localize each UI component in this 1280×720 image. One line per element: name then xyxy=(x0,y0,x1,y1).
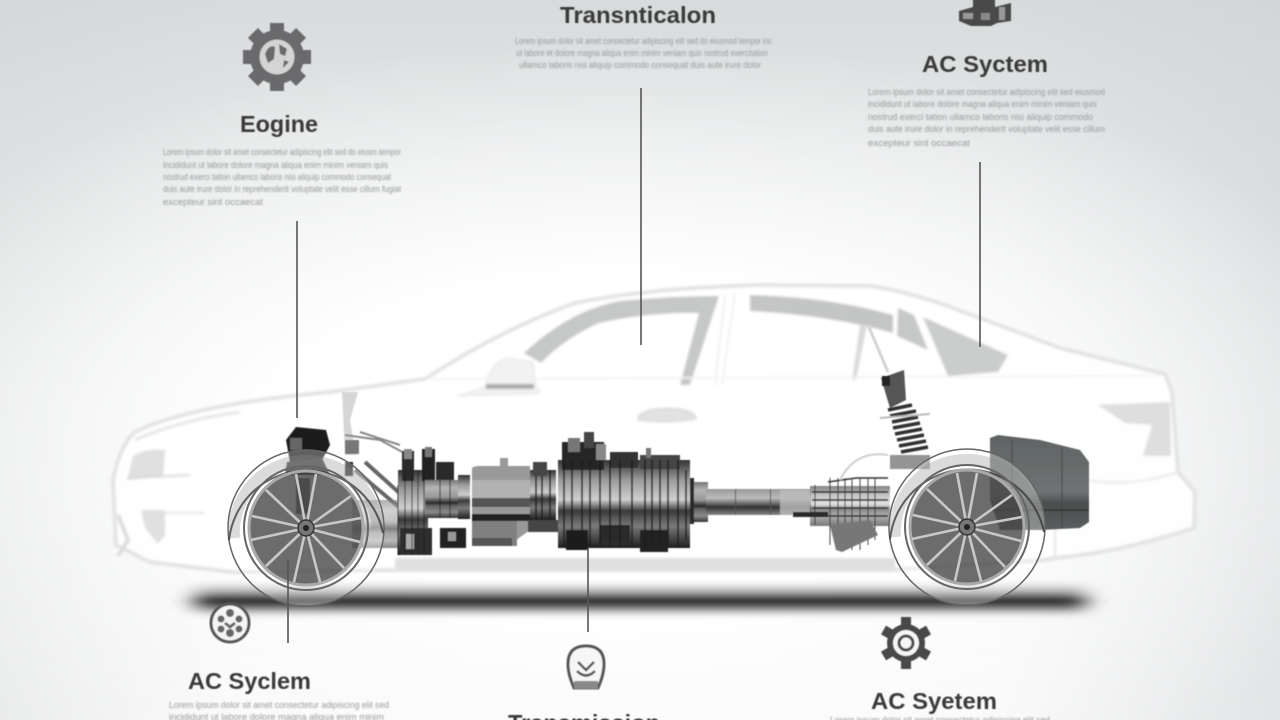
rear pillar xyxy=(852,325,867,380)
front differential xyxy=(352,447,470,555)
icon: transmission bottom xyxy=(568,646,604,689)
text: AC description top xyxy=(868,87,1105,148)
text: AC description top: nostrud exerci tation ullamco laboris nisi aliquip commodo xyxy=(868,112,1093,122)
coupling xyxy=(528,462,568,532)
mirror xyxy=(458,358,540,396)
heading: AC system top: AC Syctem xyxy=(922,51,1048,77)
text: AC description bottom-left xyxy=(169,700,389,720)
quarter glass small xyxy=(897,308,928,350)
text: engine description: incididunt ut labore dolore magna aliqua enim minim veniam quis xyxy=(163,160,388,170)
text: AC description top: incididunt ut labore dolore magna aliqua enim minim veniam quis xyxy=(868,99,1097,109)
icon: gear bottom-right xyxy=(881,617,931,669)
text: transmission description: ut labore et dolore magna aliqua enim minim veniam quis nostrud exercitation xyxy=(516,48,768,58)
text: transmission description: ullamco laboris nisi aliquip commodo consequat duis aute irure dolor xyxy=(519,60,761,70)
text: engine description: nostrud exerci tation ullamco laboris nisi aliquip commodo consequat xyxy=(163,172,391,182)
rear bumper crease xyxy=(1088,472,1178,483)
sill xyxy=(395,558,895,568)
text: engine description: Lorem ipsum dolor sit amet consectetur adipiscing elit sed do eiusm tempor xyxy=(163,147,401,157)
door handle xyxy=(638,408,696,422)
icon: AC unit xyxy=(959,0,1011,26)
heading: transmission: Transnticalon xyxy=(560,2,716,28)
text: transmission description xyxy=(515,36,772,70)
rear differential xyxy=(780,454,890,552)
car body xyxy=(113,285,1195,572)
text: AC description top: excepteur sint occaecat xyxy=(868,138,971,148)
front window xyxy=(524,296,719,385)
drive shaft xyxy=(706,489,811,515)
transmission housing xyxy=(558,432,708,552)
leader lines xyxy=(288,88,980,643)
text: AC description top: Lorem ipsum dolor sit amet consectetur adipiscing elit sed eiusmod xyxy=(868,87,1105,97)
rear window band xyxy=(750,295,893,333)
fuel tank xyxy=(990,435,1089,530)
text: transmission description: Lorem ipsum dolor sit amet consectetur adipiscing elit sed do eiusmod tempor inc xyxy=(515,36,772,46)
text: AC description bottom-left: Lorem ipsum dolor sit amet consectetur adipiscing elit sed xyxy=(169,700,389,710)
text: engine description xyxy=(163,147,401,207)
text: AC description top: duis aute irure dolor in reprehenderit voluptate velit esse cillum xyxy=(868,124,1105,134)
strut front xyxy=(342,392,408,508)
front bumper vent xyxy=(141,510,165,544)
front wheel xyxy=(228,450,384,606)
rear wheel xyxy=(889,449,1045,605)
icon: AC bottom-left xyxy=(211,604,249,642)
quarter glass xyxy=(923,317,1008,376)
text: engine description: excepteur sint occaecat xyxy=(163,197,264,207)
body shell xyxy=(113,285,1195,572)
pillar lines xyxy=(715,293,735,385)
ground shadow xyxy=(195,580,1085,620)
tail light xyxy=(1098,402,1171,456)
heading: engine: Eogine xyxy=(240,111,318,137)
drivetrain xyxy=(285,325,1089,555)
headlight xyxy=(127,450,165,480)
engine block xyxy=(285,427,330,514)
text: engine description: duis aute irure dolor in reprehenderit voluptate velit esse cillum fugiat xyxy=(163,184,401,194)
main cylinder xyxy=(472,458,530,546)
icon: engine gear xyxy=(243,23,311,91)
heading: AC system bottom-left: AC Syclem xyxy=(188,668,311,694)
heading: AC system bottom-right: AC Syetem xyxy=(871,688,997,714)
rear shock xyxy=(868,325,930,469)
